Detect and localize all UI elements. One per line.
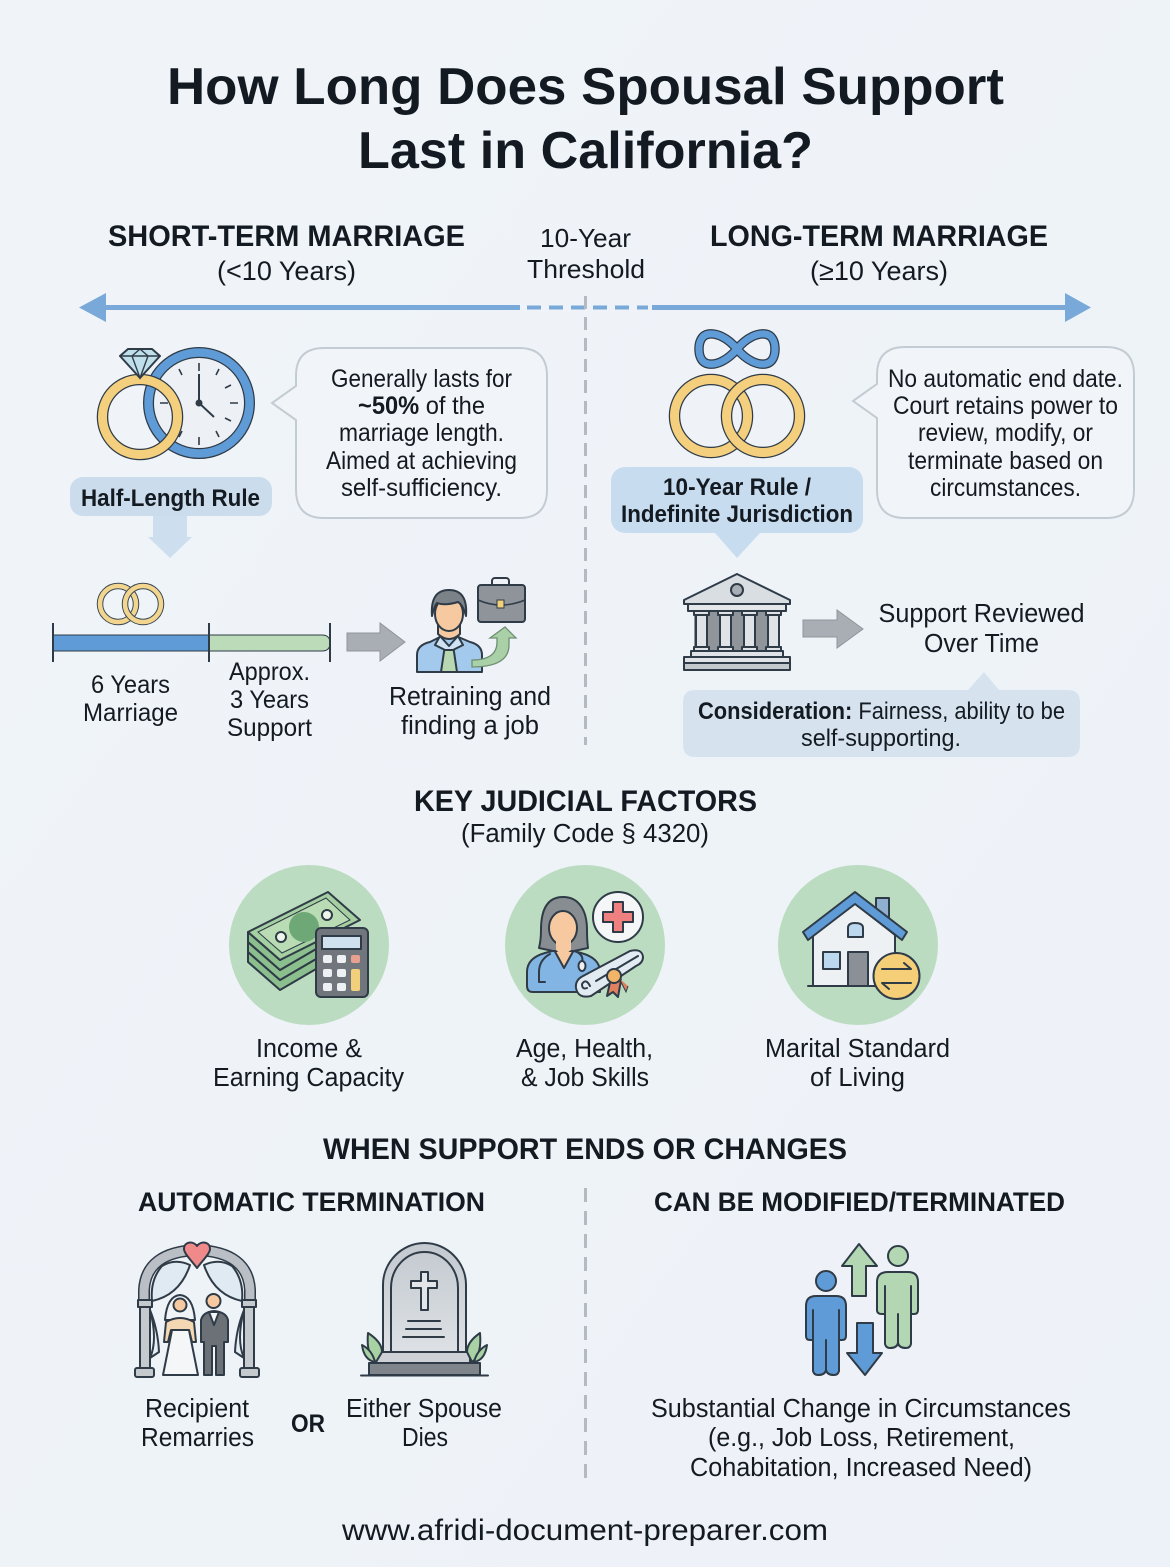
label: marital standard of living: Marital Standard — [765, 1035, 950, 1063]
icon: gravestone — [361, 1243, 488, 1376]
callout: no automatic end date: circumstances. — [930, 474, 1081, 502]
callout: no automatic end date: Court retains power to — [893, 392, 1118, 420]
heading: automatic termination: AUTOMATIC TERMINATION — [138, 1187, 485, 1217]
label: income and earning capacity: Earning Capacity — [213, 1064, 404, 1092]
label: or: OR — [291, 1410, 325, 1438]
footer: website: www.afridi-document-preparer.com — [341, 1514, 828, 1547]
heading: 10-year threshold: 10-Year — [540, 223, 631, 253]
callout: no automatic end date: terminate based on — [908, 447, 1103, 475]
label: income and earning capacity — [213, 1035, 404, 1092]
callout: no automatic end date: review, modify, or — [918, 419, 1093, 447]
label: age, health, job skills: & Job Skills — [521, 1064, 649, 1092]
heading: key judicial factors: (Family Code § 4320) — [461, 820, 709, 848]
callout: consideration — [683, 672, 1080, 757]
label: age, health, job skills — [516, 1035, 653, 1092]
label: approx 3 years support: Support — [227, 714, 312, 742]
chart: marriage and support timeline bar — [53, 623, 330, 662]
label: 6 years marriage: Marriage — [83, 699, 178, 727]
label: half-length rule: Half-Length Rule — [81, 485, 260, 512]
text: support reviewed over time: Over Time — [924, 630, 1039, 658]
callout: no automatic end date — [853, 347, 1134, 518]
icon: house with exchange coin — [778, 865, 938, 1025]
label: substantial change in circumstances: Substantial Change in Circumstances — [651, 1395, 1071, 1423]
label: 10-year rule — [611, 467, 863, 533]
label: substantial change in circumstances: Cohabitation, Increased Need) — [690, 1454, 1032, 1482]
callout: half-length explanation: Aimed at achieving — [326, 447, 517, 475]
label: retraining and finding a job: finding a job — [401, 712, 539, 740]
label: 10-year rule: Indefinite Jurisdiction — [621, 501, 853, 528]
label: approx 3 years support: 3 Years — [230, 686, 309, 714]
label: substantial change in circumstances: (e.g., Job Loss, Retirement, — [708, 1424, 1015, 1452]
callout: half-length explanation: marriage length. — [339, 419, 504, 447]
label: 10-year rule: 10-Year Rule / — [663, 474, 811, 501]
label: 6 years marriage — [83, 671, 178, 727]
title: How Long Does Spousal Support — [167, 58, 1004, 116]
callout: half-length explanation: self-sufficiency. — [341, 474, 502, 502]
label: recipient remarries — [141, 1395, 254, 1452]
heading: 10-year threshold: Threshold — [527, 254, 645, 284]
label: substantial change in circumstances — [651, 1395, 1071, 1482]
label: approx 3 years support: Approx. — [229, 658, 310, 686]
icon: courthouse — [684, 574, 790, 670]
arrow: to retraining — [347, 623, 405, 661]
label: either spouse dies — [346, 1395, 502, 1452]
heading: long-term marriage: LONG-TERM MARRIAGE — [710, 220, 1048, 253]
icon: infinity and linked rings — [674, 334, 800, 452]
label: recipient remarries: Recipient — [145, 1395, 249, 1423]
label: half-length rule — [70, 477, 272, 516]
arrow: timeline axis — [79, 293, 1091, 322]
label: approx 3 years support — [227, 658, 312, 742]
icon: two people with up and down arrows — [806, 1244, 918, 1375]
callout: half-length explanation: Generally lasts for — [331, 365, 512, 393]
heading: key judicial factors — [414, 785, 757, 848]
heading: can be modified or terminated: CAN BE MODIFIED/TERMINATED — [654, 1187, 1065, 1217]
heading: key judicial factors: KEY JUDICIAL FACTORS — [414, 785, 757, 818]
label: recipient remarries: Remarries — [141, 1424, 254, 1452]
label: either spouse dies: Either Spouse — [346, 1395, 502, 1423]
label: income and earning capacity: Income & — [256, 1035, 362, 1063]
label: retraining and finding a job — [389, 683, 551, 740]
icon: wedding arch with couple — [135, 1243, 259, 1377]
icon: ring and clock — [102, 349, 250, 454]
icon: person with briefcase — [417, 578, 525, 672]
title — [167, 58, 1004, 180]
label: marital standard of living: of Living — [810, 1064, 905, 1092]
heading: when support ends or changes: WHEN SUPPORT ENDS OR CHANGES — [323, 1133, 847, 1166]
callout: no automatic end date: No automatic end date. — [888, 365, 1123, 393]
text: support reviewed over time: Support Reviewed — [878, 600, 1084, 628]
heading: long-term marriage — [710, 220, 1048, 286]
heading: 10-year threshold — [527, 223, 645, 284]
text: support reviewed over time — [878, 600, 1084, 658]
label: marital standard of living — [765, 1035, 950, 1092]
label: retraining and finding a job: Retraining and — [389, 683, 551, 711]
label: 6 years marriage: 6 Years — [91, 671, 170, 699]
arrow: 10-year rule down — [715, 533, 760, 558]
arrow: to support reviewed — [803, 610, 863, 648]
icon: money and calculator — [229, 865, 389, 1025]
callout: half-length explanation — [272, 348, 547, 518]
heading: short-term marriage: SHORT-TERM MARRIAGE — [108, 220, 465, 253]
label: age, health, job skills: Age, Health, — [516, 1035, 653, 1063]
label: either spouse dies: Dies — [402, 1424, 448, 1452]
heading: short-term marriage: (<10 Years) — [217, 256, 356, 286]
heading: long-term marriage: (≥10 Years) — [810, 256, 948, 286]
icon: small wedding rings — [100, 586, 161, 622]
arrow: half-length rule down — [148, 516, 192, 558]
title: Last in California? — [358, 122, 813, 180]
heading: short-term marriage — [108, 220, 465, 286]
callout: consideration: Consideration: Fairness, ability to be — [698, 698, 1065, 725]
callout: consideration: self-supporting. — [801, 725, 961, 752]
callout: half-length explanation: ~50% of the — [358, 392, 485, 420]
icon: woman with medical cross and diploma — [505, 865, 665, 1025]
